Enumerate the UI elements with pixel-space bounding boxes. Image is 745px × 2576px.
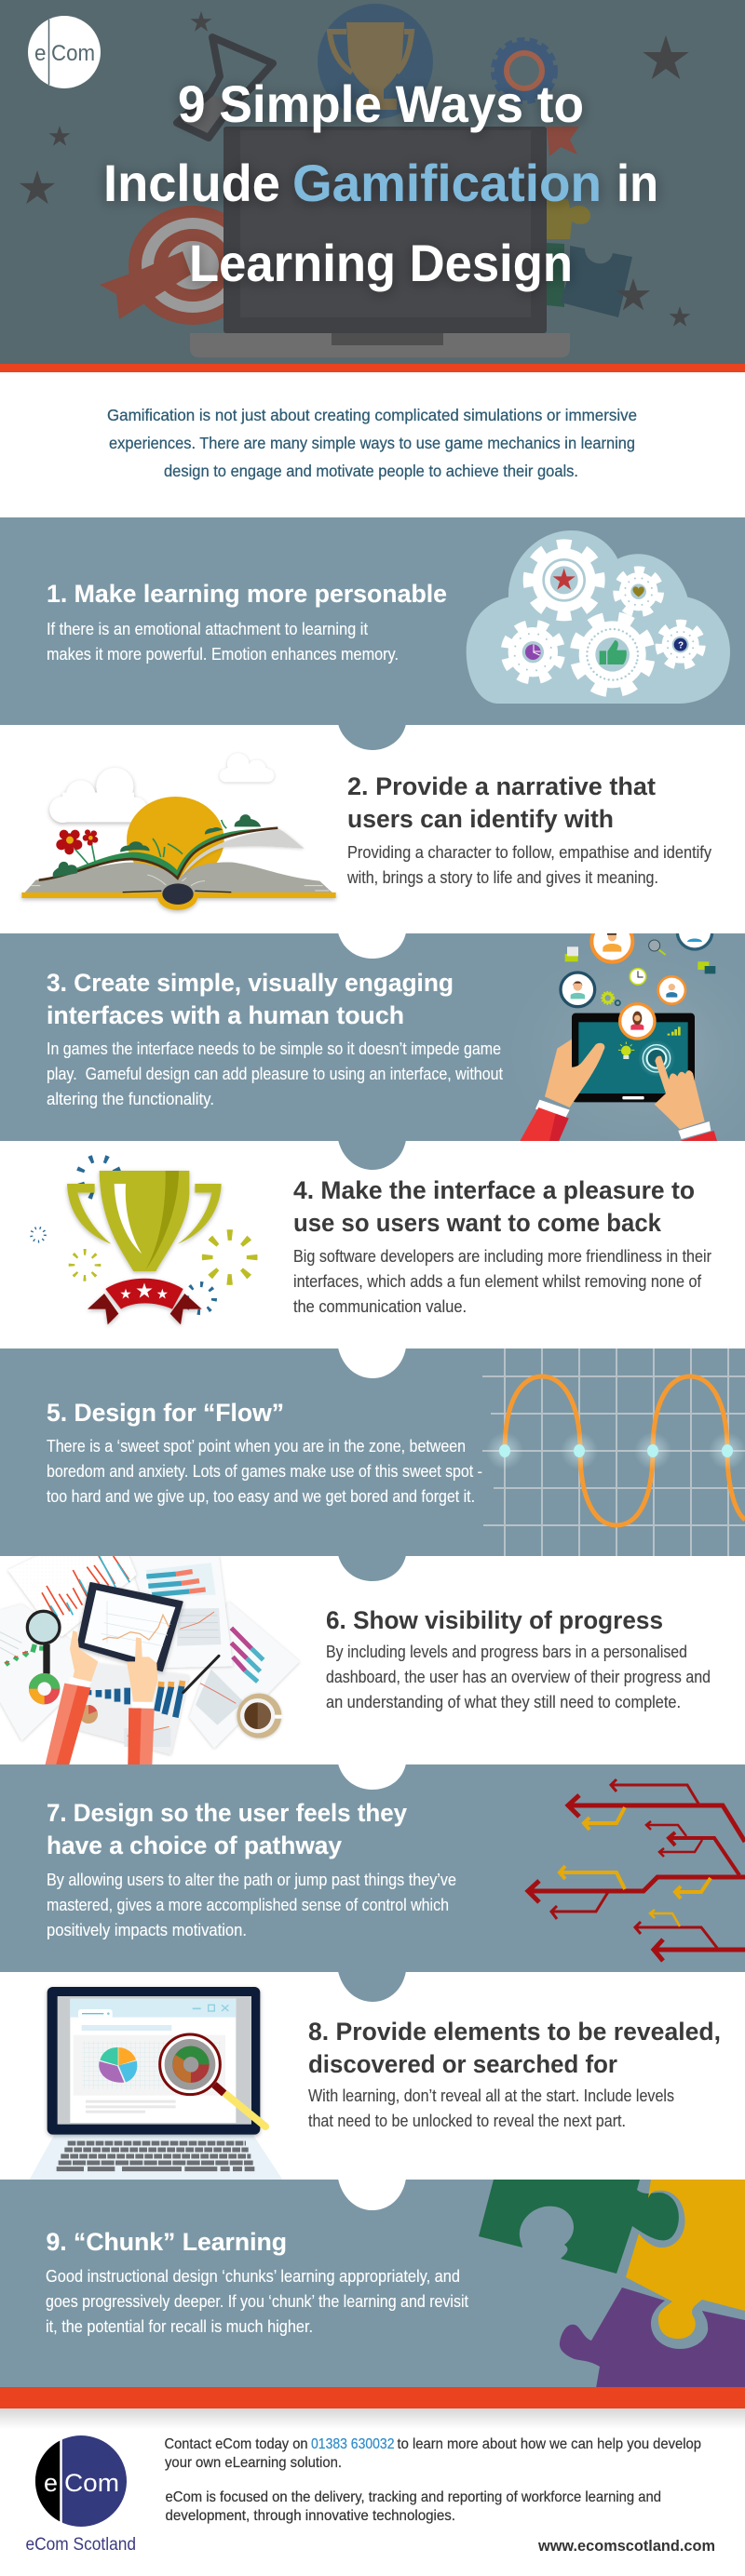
heading: step 4 [293,1176,695,1237]
panel: step 8 revealed [30,1987,721,2180]
text: website: www.ecomscotland.com [537,2537,715,2555]
text: contact call to action: Contact eCom today on [164,2436,307,2452]
text: step 7 body: By allowing users to alter the path or jump past things they’ve [47,1871,456,1889]
title: Learning Design [189,234,573,292]
icon: cloud of gears: ? [678,640,684,651]
panel: step 4 pleasure [32,1158,711,1324]
heading: step 1: 1. Make learning more personable [47,580,447,608]
icon: hands on tablet with avatars [520,915,717,1141]
logo: eCom badge: Com [51,41,95,66]
text: step 3 body: In games the interface needs to be simple so it doesn’t impede game [47,1040,501,1058]
text: step 6 body: By including levels and progress bars in a personalised [326,1643,687,1661]
intro paragraph: experiences. There are many simple ways to use game mechanics in learning [109,434,635,452]
logo: eCom badge: e [34,41,47,66]
icon: puzzle pieces [479,2180,745,2388]
text: step 9 body: Good instructional design ‘chunks’ learning appropriately, and [46,2267,460,2286]
text: step 7 body: mastered, gives a more accomplished sense of control which [47,1896,449,1914]
intro paragraph [107,406,637,480]
text: step 5 body [47,1437,482,1506]
heading: step 8: discovered or searched for [308,2050,617,2078]
text: step 3 body [47,1040,503,1108]
heading: step 7: 7. Design so the user feels they [47,1799,407,1827]
heading: step 2: users can identify with [347,805,614,833]
chart: flow sine wave [482,1348,745,1556]
icon: branching arrows [528,1779,745,1961]
footer [26,2435,715,2555]
text: step 1 body: If there is an emotional attachment to learning it [47,620,368,638]
text: step 4 body: the communication value. [293,1297,467,1316]
logo: eCom Scotland [26,2435,136,2555]
text: step 2 body [346,843,711,887]
text: step 2 body: Providing a character to follow, empathise and identify [347,843,711,862]
text: contact call to action: your own eLearning solution. [165,2455,342,2471]
heading: step 2 [347,772,656,833]
text: step 1 body: makes it more powerful. Emotion enhances memory. [47,645,399,664]
title: Include [103,154,280,212]
text: step 8 body [308,2086,674,2130]
text: step 6 body [326,1643,711,1711]
icon: cloud of gears [467,530,730,704]
heading: step 8: 8. Provide elements to be revealed, [308,2018,721,2046]
text: step 5 body: boredom and anxiety. Lots of games make use of this sweet spot - [47,1462,482,1481]
icon: dashboard desk with tablet [0,1556,300,1765]
logo: eCom badge [28,16,101,88]
text: contact call to action: to learn more about how we can help you develop [397,2436,701,2452]
heading: step 7: have a choice of pathway [47,1831,342,1859]
text: step 9 body [46,2267,468,2336]
text: step 6 body: an understanding of what they still need to complete. [326,1693,681,1711]
logo: eCom Scotland: e [44,2469,58,2497]
intro paragraph: design to engage and motivate people to achieve their goals. [164,462,578,480]
text: step 5 body: There is a ‘sweet spot’ point when you are in the zone, between [47,1437,466,1456]
panel: step 1 personable [0,517,745,750]
heading: step 4: 4. Make the interface a pleasure to [293,1176,695,1204]
header banner [0,0,745,364]
text: step 5 body: too hard and we give up, too easy and we get bored and forget it. [47,1487,475,1506]
heading: step 6: 6. Show visibility of progress [326,1606,663,1634]
title: 9 Simple Ways to [178,74,584,133]
icon: laptop with magnifier [30,1987,282,2180]
title: Gamification [292,154,602,212]
text: about eCom: development, through innovative technologies. [166,2508,455,2524]
text: contact call to action: 01383 630032 [311,2436,395,2452]
text: step 7 body: positively impacts motivation. [47,1921,247,1939]
heading: step 2: 2. Provide a narrative that [347,772,656,800]
heading: step 3: 3. Create simple, visually engaging [47,969,454,997]
heading: step 5: 5. Design for “Flow” [47,1399,284,1427]
panel: step 7 pathway [0,1764,745,2002]
heading: step 7 [47,1799,407,1859]
text: step 2 body: with, brings a story to life and gives it meaning. [346,868,658,887]
text: step 8 body: that need to be unlocked to reveal the next part. [308,2112,626,2130]
text: step 8 body: With learning, don’t reveal all at the start. Include levels [308,2086,674,2105]
icon: trophy with ribbon [32,1158,252,1324]
text: about eCom [166,2489,661,2524]
heading: step 9: 9. “Chunk” Learning [47,2228,287,2256]
intro paragraph: Gamification is not just about creating complicated simulations or immersive [107,406,637,424]
heading: step 8 [308,2018,721,2078]
text: step 3 body: altering the functionality. [47,1090,214,1108]
heading: step 3 [47,969,454,1029]
text: step 1 body [47,620,399,664]
header illustration: gamification icons [20,4,690,357]
title: in [616,154,658,212]
heading: step 4: use so users want to come back [293,1209,662,1237]
text: contact call to action [164,2436,701,2471]
text: about eCom: eCom is focused on the delivery, tracking and reporting of workforce learning and [166,2489,661,2505]
orange divider bar [0,364,745,372]
text: step 4 body [293,1247,711,1316]
orange footer bar [0,2387,745,2408]
logo: eCom Scotland: Com [64,2469,119,2497]
heading: step 3: interfaces with a human touch [47,1001,404,1029]
panel: step 6 progress [0,1556,711,1765]
panel: step 5 flow [0,1348,745,1581]
text: step 3 body: play. Gameful design can add pleasure to using an interface, without [47,1065,503,1083]
panel: step 3 interfaces [0,915,745,1173]
icon: open storybook [21,753,336,910]
panel: step 9 chunk [0,2179,745,2388]
text: step 7 body [47,1871,456,1939]
text: step 9 body: goes progressively deeper. If you ‘chunk’ the learning and revisit [46,2292,468,2311]
text: step 9 body: it, the potential for recall is much higher. [46,2317,313,2336]
panel: step 2 narrative [21,753,711,910]
text: step 4 body: interfaces, which adds a fun element whilst removing none of [293,1272,702,1291]
logo: eCom Scotland: eCom Scotland [26,2535,136,2555]
title [103,74,658,292]
